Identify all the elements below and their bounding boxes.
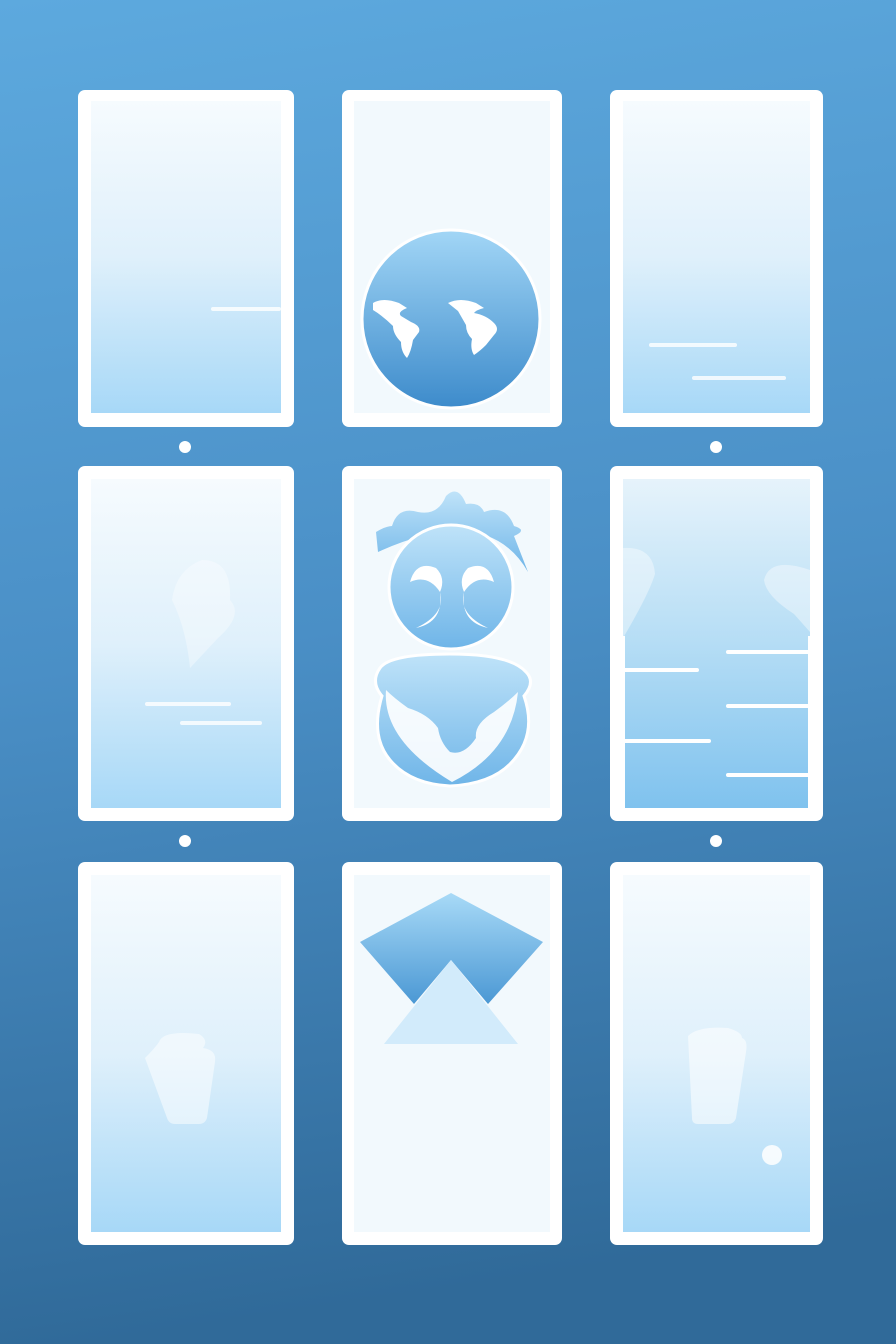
panel: row3 col3	[610, 862, 823, 1245]
icon: diamond and triangle	[360, 893, 543, 1044]
panel: row3 col1	[78, 862, 294, 1245]
panel: row2 col1	[78, 466, 294, 821]
icon: globe	[362, 230, 540, 408]
connector dots	[179, 441, 722, 847]
panel: row1 col2 globe	[342, 90, 562, 427]
icon: lower emblem	[375, 654, 531, 786]
panel: row3 col2 shapes	[342, 862, 562, 1245]
panel: row1 col3	[610, 90, 823, 427]
panel: row1 col1	[78, 90, 294, 427]
panel: row2 col3	[610, 466, 823, 821]
panel: row2 col2 emblem	[342, 466, 562, 821]
icon: upper emblem	[376, 492, 528, 649]
